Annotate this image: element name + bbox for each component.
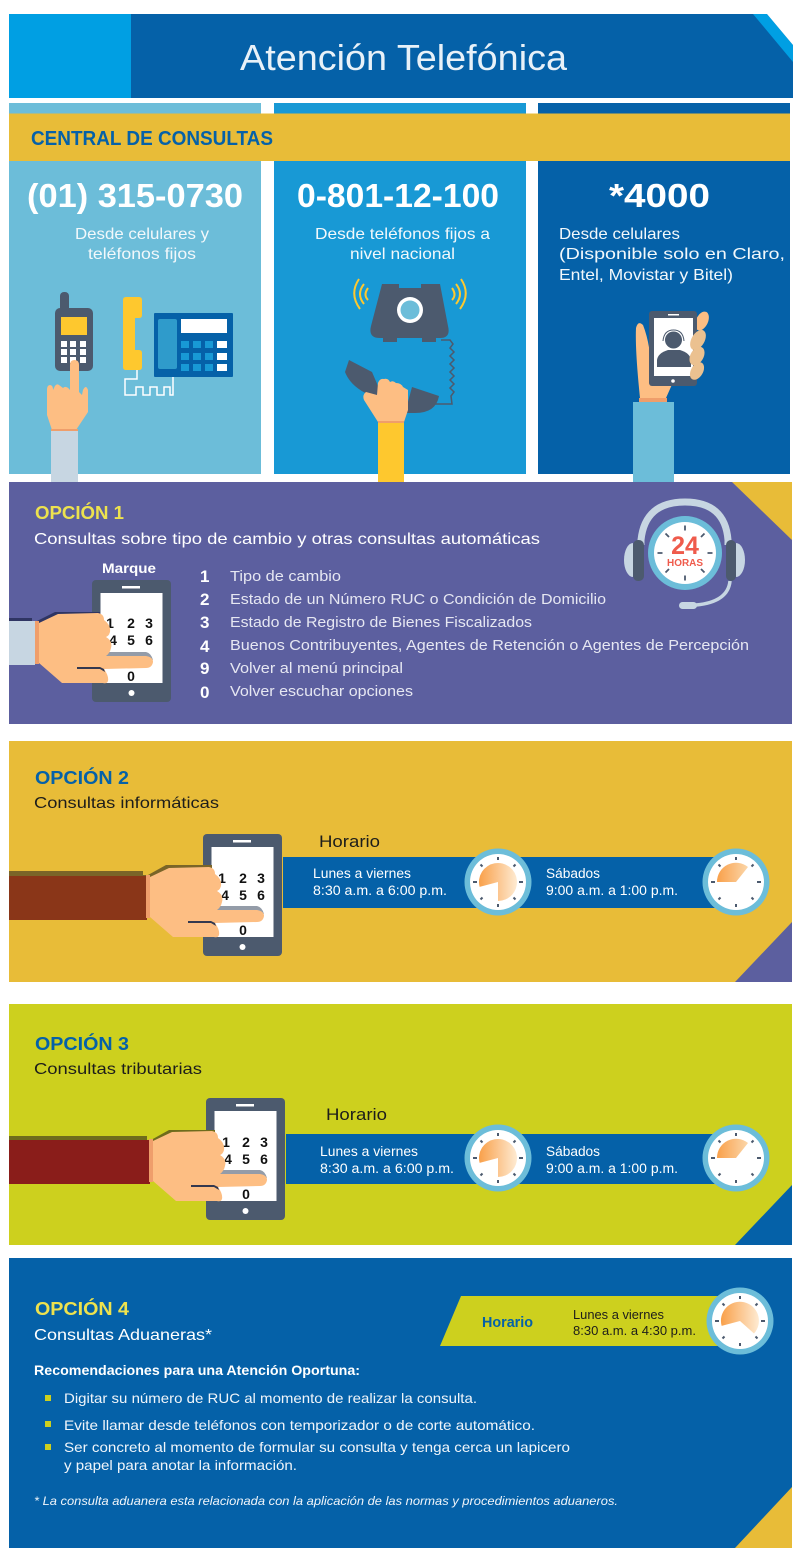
list: menu options: 0: [200, 683, 209, 702]
icon: 24 horas headset clock: HORAS: [667, 557, 703, 569]
icon: hand dialling on phone: 2: [127, 615, 135, 631]
panel: opción 2: [9, 741, 792, 982]
text: saturday hours: [546, 866, 678, 898]
icon: hand dialling on phone: 3: [145, 615, 153, 631]
icon: clock weekday: [464, 1124, 532, 1192]
description 3: (Disponible solo en Claro,: [559, 246, 785, 263]
subtitle: opción 3: Consultas tributarias: [34, 1061, 202, 1078]
phone number 2: 0-801-12-100: [297, 177, 499, 214]
text: weekday hours: 8:30 a.m. a 6:00 p.m.: [320, 1161, 454, 1176]
icon: desk telephone: [123, 297, 233, 395]
text: weekday hours: Lunes a viernes: [313, 866, 411, 881]
text: weekday hours: [320, 1144, 454, 1176]
icon: hand dialling on phone: [9, 580, 171, 702]
icon: 24 horas headset clock: 24: [671, 532, 699, 560]
list: menu options: 1: [200, 567, 209, 586]
heading: opción 3: OPCIÓN 3: [35, 1033, 129, 1054]
icon: clock customs: [706, 1288, 774, 1354]
icon: hand dialling on phone: 0: [127, 668, 135, 684]
list: menu options: 2: [200, 590, 209, 609]
phone number 1: (01) 315-0730: [27, 177, 243, 214]
title: Atención Telefónica: [240, 37, 568, 78]
description 2: Desde teléfonos fijos a: [315, 226, 490, 243]
icon: hand dialling on phone: 4: [109, 632, 117, 648]
icon: hand dialling on phone: 5: [239, 887, 247, 903]
icon: hand dialling on phone: [9, 834, 282, 956]
subtitle: opción 4: Consultas Aduaneras*: [34, 1327, 212, 1344]
icon: hand dialling on phone: 0: [239, 922, 247, 938]
schedule band: [283, 857, 723, 908]
subtitle: opción 2: Consultas informáticas: [34, 795, 219, 812]
label: horario: Horario: [482, 1315, 533, 1331]
list: menu options: Estado de Registro de Bienes Fiscalizados: [230, 614, 532, 631]
icon: clock saturday: [702, 848, 770, 916]
text: saturday hours: Sábados: [546, 1144, 600, 1159]
icon: hand dialling on phone: 6: [260, 1151, 268, 1167]
text: weekday hours: 8:30 a.m. a 6:00 p.m.: [313, 883, 447, 898]
subtitle: opción 1: Consultas sobre tipo de cambio y otras consultas automáticas: [34, 531, 540, 548]
label: horario: Horario: [319, 832, 380, 851]
description 3: Entel, Movistar y Bitel): [559, 267, 733, 284]
label: horario: Horario: [326, 1105, 387, 1124]
icon: hand dialling on phone: [9, 1098, 285, 1220]
list: menu options: 4: [200, 637, 210, 656]
icon: hand dialling on phone: 6: [257, 887, 265, 903]
icon: hand dialling on phone: 6: [145, 632, 153, 648]
icon: hand dialling on phone: 1: [218, 870, 226, 886]
description 2: nivel nacional: [350, 246, 455, 263]
panel: opción 1: [9, 482, 792, 724]
text: saturday hours: 9:00 a.m. a 1:00 p.m.: [546, 883, 678, 898]
panel: central de consultas: [9, 103, 790, 482]
heading: opción 2: OPCIÓN 2: [35, 767, 129, 788]
icon: hand dialling on phone: 1: [106, 615, 114, 631]
footnote: * La consulta aduanera esta relacionada con la aplicación de las normas y procedimientos aduaneros.: [34, 1494, 618, 1508]
description 1: Desde celulares y: [75, 226, 209, 243]
list: menu options: Tipo de cambio: [230, 568, 341, 585]
text: saturday hours: 9:00 a.m. a 1:00 p.m.: [546, 1161, 678, 1176]
text: saturday hours: Sábados: [546, 866, 600, 881]
icon: hand dialling on phone: 2: [239, 870, 247, 886]
icon: ringing telephone with hand: [345, 279, 466, 482]
icon: hand dialling on phone: 2: [242, 1134, 250, 1150]
icon: hand dialling on phone: 3: [260, 1134, 268, 1150]
icon: hand dialling on phone: 0: [242, 1186, 250, 1202]
text: customs hours: Lunes a viernes: [573, 1307, 664, 1322]
description 3: Desde celulares: [559, 226, 680, 243]
list: menu options: [200, 567, 749, 702]
description 1: teléfonos fijos: [88, 246, 196, 263]
list: recommendations: Digitar su número de RUC al momento de realizar la consulta.: [64, 1390, 477, 1406]
text: weekday hours: [313, 866, 447, 898]
icon: cell phone with hand: [47, 292, 93, 482]
text: customs hours: 8:30 a.m. a 4:30 p.m.: [573, 1323, 696, 1338]
icon: clock saturday: [702, 1124, 770, 1192]
panel: opción 3: [9, 1004, 792, 1245]
list: menu options: Estado de un Número RUC o Condición de Domicilio: [230, 591, 606, 608]
heading: opción 1: OPCIÓN 1: [35, 502, 124, 523]
list: recommendations: Ser concreto al momento de formular su consulta y tenga cerca un lapicero: [64, 1439, 570, 1455]
panel: opción 4: [9, 1258, 792, 1548]
icon: 24 horas headset clock: [624, 502, 745, 609]
list: menu options: Buenos Contribuyentes, Agentes de Retención o Agentes de Percepción: [230, 637, 749, 654]
description 2: [315, 226, 490, 263]
icon: clock weekday: [464, 848, 532, 916]
icon: hand dialling on phone: 5: [127, 632, 135, 648]
list: menu options: 9: [200, 659, 209, 678]
list: menu options: Volver al menú principal: [230, 660, 403, 677]
phone number 3: *4000: [609, 177, 710, 214]
schedule band: [440, 1296, 725, 1346]
icon: hand dialling on phone: 3: [257, 870, 265, 886]
list: menu options: Volver escuchar opciones: [230, 683, 413, 700]
schedule band: [286, 1134, 723, 1184]
list: recommendations: [45, 1390, 570, 1473]
text: customs hours: [573, 1307, 696, 1338]
icon: hand dialling on phone: 4: [224, 1151, 232, 1167]
text: saturday hours: [546, 1144, 678, 1176]
icon: hand dialling on phone: 4: [221, 887, 229, 903]
heading: central de consultas: CENTRAL DE CONSULTAS: [31, 128, 273, 150]
icon: hand dialling on phone: 1: [222, 1134, 230, 1150]
text: recommendations heading: Recomendaciones para una Atención Oportuna:: [34, 1362, 360, 1378]
title banner: [9, 14, 793, 98]
list: recommendations: y papel para anotar la información.: [64, 1457, 297, 1473]
list: menu options: 3: [200, 613, 209, 632]
description 3: [559, 226, 785, 284]
icon: hand dialling on phone: 5: [242, 1151, 250, 1167]
label: marque: Marque: [102, 560, 156, 576]
description 1: [75, 226, 209, 263]
list: recommendations: Evite llamar desde teléfonos con temporizador o de corte automático.: [64, 1417, 535, 1433]
text: weekday hours: Lunes a viernes: [320, 1144, 418, 1159]
heading: opción 4: OPCIÓN 4: [35, 1298, 129, 1319]
icon: smartphone in hand: [633, 309, 712, 482]
